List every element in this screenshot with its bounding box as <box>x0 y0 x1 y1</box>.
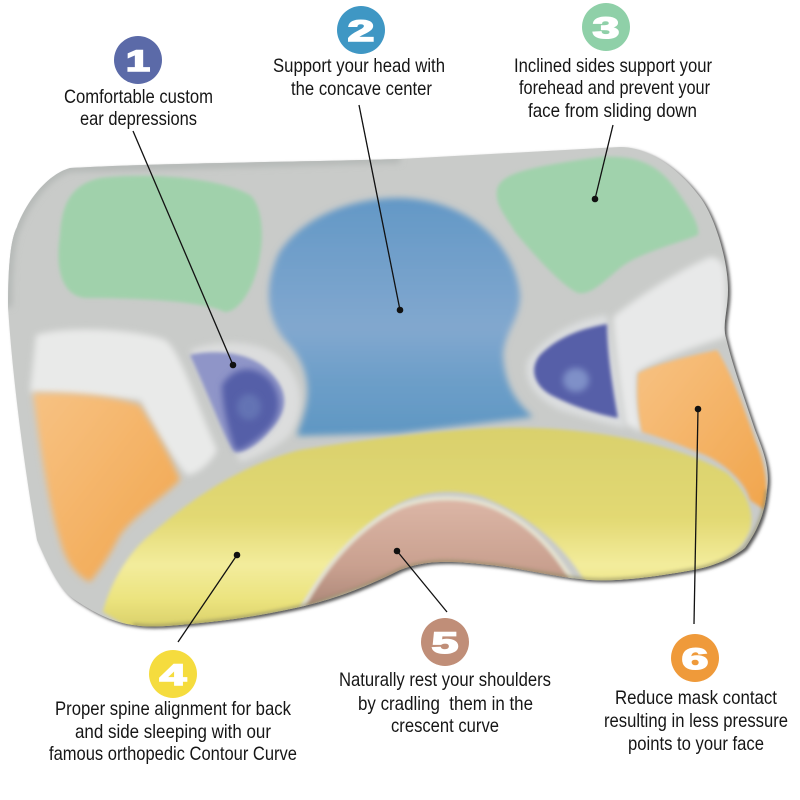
callout 6 text: Reduce mask contact <box>615 687 777 709</box>
callout 1 text <box>64 86 213 130</box>
leader line 5 <box>394 548 447 612</box>
badge 4: 4 <box>160 659 187 692</box>
callout 2 text: the concave center <box>291 78 432 100</box>
pillow rim shading <box>8 159 400 307</box>
callout 5 text: crescent curve <box>391 715 499 737</box>
callout 4 text: and side sleeping with our <box>75 721 271 743</box>
callout 6 text <box>604 687 788 755</box>
badge 2 <box>337 6 385 54</box>
callout 3 text <box>514 55 712 122</box>
pink crescent zone <box>300 498 576 612</box>
purple ear left <box>190 352 284 452</box>
purple ear right <box>534 324 618 418</box>
badge 1: 1 <box>126 44 150 77</box>
callout 4 text <box>49 698 297 765</box>
badge 1 <box>114 36 162 84</box>
callout 5 text <box>339 669 551 737</box>
leader line 6 <box>694 406 701 624</box>
callout 2 text <box>273 55 445 100</box>
callout 1 text: Comfortable custom <box>64 86 213 108</box>
leader line 3 <box>592 125 613 202</box>
yellow contour zone <box>103 428 751 630</box>
callout 2 text: Support your head with <box>273 55 445 77</box>
badge 4 <box>149 650 197 698</box>
orange zone left <box>33 393 180 582</box>
leader line 2 <box>359 105 403 313</box>
white side panel left <box>30 330 217 475</box>
callout 3 text: forehead and prevent your <box>519 77 710 99</box>
white side panel right <box>613 257 726 432</box>
right ear halo <box>527 315 625 428</box>
callout 3 text: face from sliding down <box>528 100 697 122</box>
badge 5 <box>421 618 469 666</box>
callout 4 text: Proper spine alignment for back <box>55 698 291 720</box>
blue center zone <box>269 198 533 436</box>
callout 1 text: ear depressions <box>80 108 197 130</box>
badge 2: 2 <box>348 15 374 48</box>
leader line 1 <box>133 131 236 368</box>
badge 6 <box>671 634 719 682</box>
orange zone right <box>637 350 767 510</box>
badge 5: 5 <box>432 627 458 660</box>
bottom edge shading <box>133 490 767 626</box>
callout 5 text: Naturally rest your shoulders <box>339 669 551 691</box>
callout 3 text: Inclined sides support your <box>514 55 712 77</box>
callout 5 text: by cradling them in the <box>358 693 533 715</box>
badge 3 <box>582 3 630 51</box>
leader line 4 <box>178 552 240 642</box>
callout 6 text: points to your face <box>628 733 764 755</box>
green zone right <box>497 157 698 293</box>
left ear halo <box>190 343 300 462</box>
callout 4 text: famous orthopedic Contour Curve <box>49 743 297 765</box>
badge 6: 6 <box>682 643 708 676</box>
pillow <box>0 140 800 640</box>
badge 3: 3 <box>593 12 619 45</box>
green zone left <box>58 176 262 312</box>
